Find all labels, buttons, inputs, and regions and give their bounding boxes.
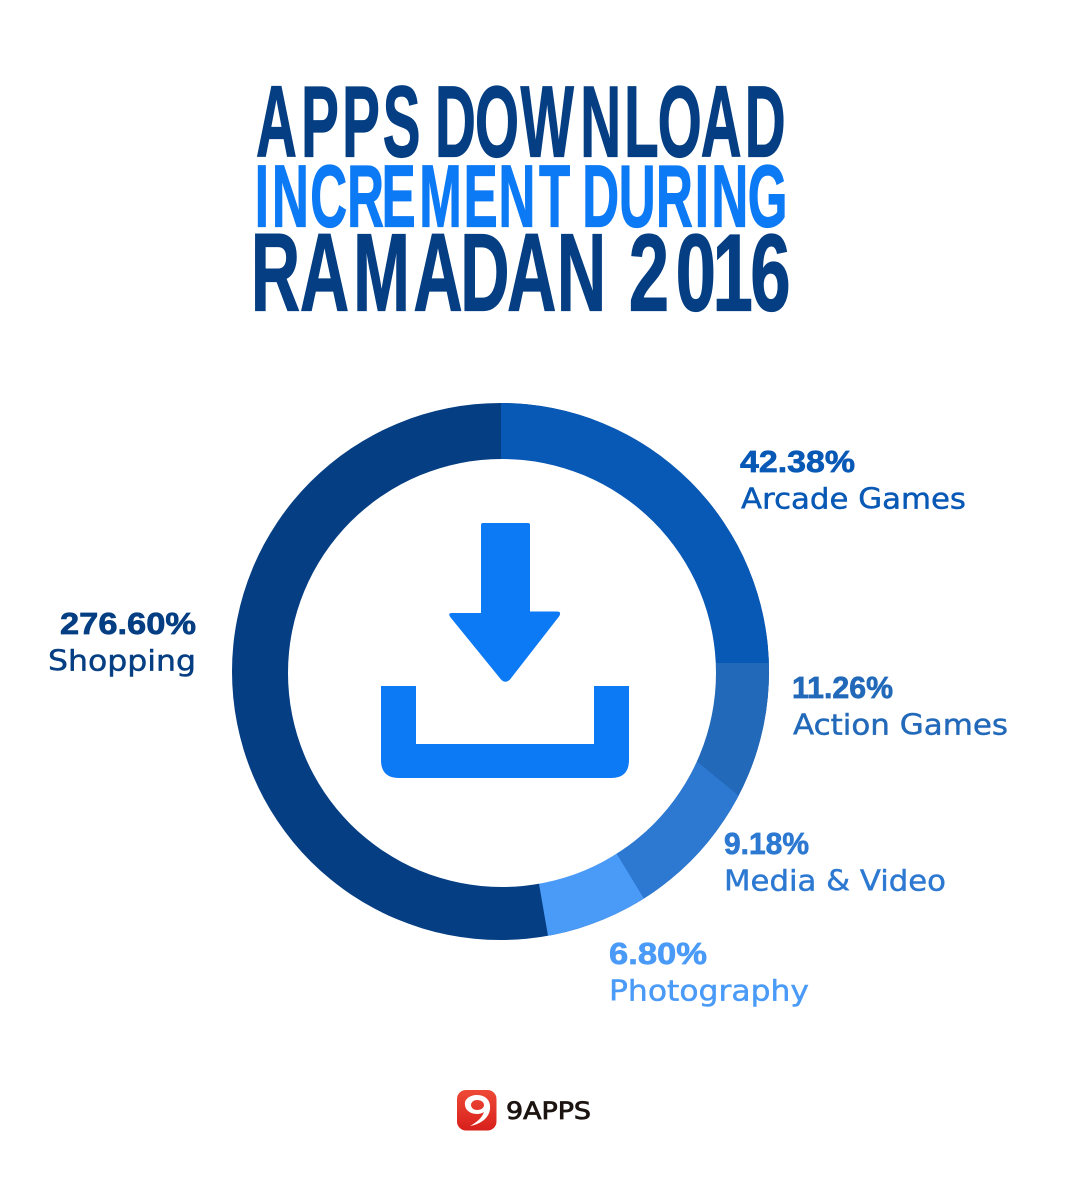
- segment: photography: [539, 854, 644, 936]
- segment: shopping: [232, 403, 769, 940]
- title line: ramadan 2016: 2016: [629, 211, 791, 334]
- label: action games: 11.26%: [792, 670, 893, 705]
- icon: download arrow: [449, 523, 560, 682]
- title line: increment during: INCREMENT DURING: [255, 148, 787, 246]
- icon: 9apps app icon: [457, 1090, 496, 1130]
- label: photography: Photography: [609, 974, 809, 1008]
- title line: ramadan 2016: RAMADAN: [251, 212, 606, 335]
- label: photography: [609, 936, 809, 1008]
- label: arcade games: [740, 444, 966, 516]
- logo: 9apps: [457, 1090, 591, 1130]
- label: media and video: 9.18%: [724, 826, 809, 861]
- title line: ramadan 2016: [251, 211, 791, 335]
- label: shopping: 276.60%: [60, 606, 196, 641]
- segment: action games: [697, 663, 769, 796]
- segment: media and video: [616, 761, 739, 898]
- label: action games: Action Games: [793, 708, 1008, 742]
- label: action games: [792, 670, 1008, 742]
- label: media and video: Media & Video: [724, 864, 946, 898]
- label: photography: 6.80%: [609, 936, 707, 971]
- label: shopping: [48, 606, 196, 678]
- donut hole: [288, 459, 716, 887]
- title line: apps download: APPS DOWNLOAD: [256, 66, 786, 179]
- icon: download: [381, 523, 629, 778]
- icon: download tray: [381, 686, 629, 778]
- segment: arcade games: [501, 403, 769, 663]
- label: arcade games: Arcade Games: [741, 482, 966, 516]
- title: [251, 66, 791, 335]
- label: media and video: [724, 826, 946, 898]
- label: arcade games: 42.38%: [740, 444, 855, 479]
- logo wordmark: 9APPS: [506, 1097, 591, 1125]
- donut chart: [232, 403, 769, 940]
- label: shopping: Shopping: [48, 644, 196, 678]
